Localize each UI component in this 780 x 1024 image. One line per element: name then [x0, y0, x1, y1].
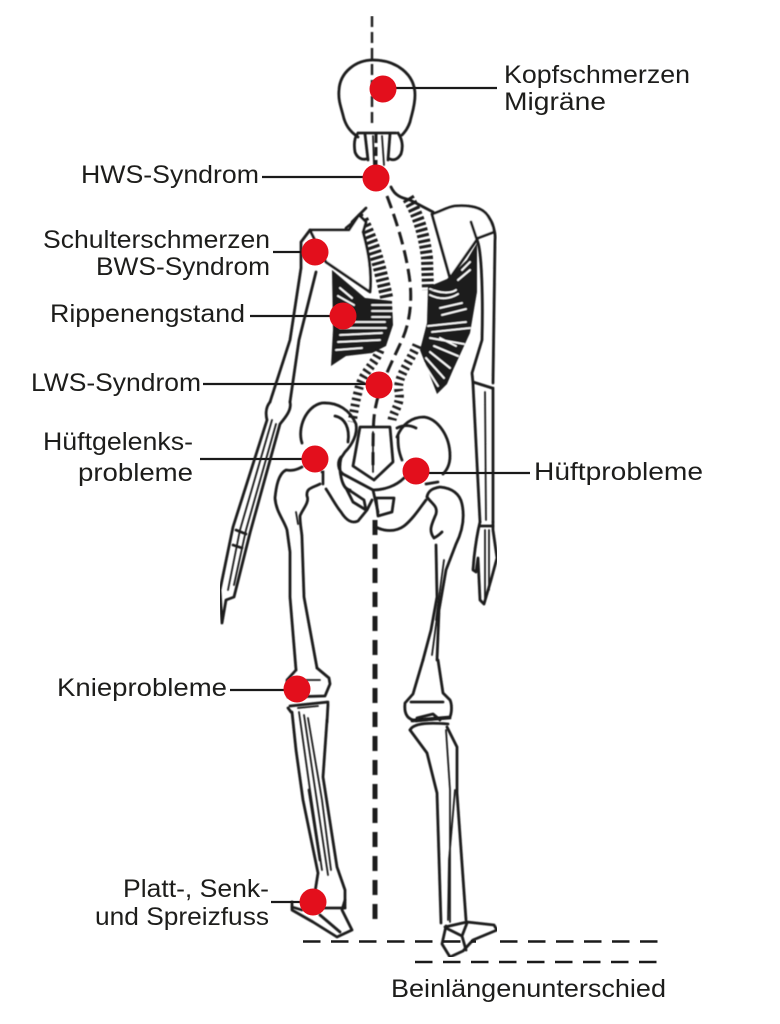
right foot [442, 922, 497, 957]
callout: LWS-Syndrom [31, 369, 392, 398]
callout: Schulterschmerzen BWS-Syndrom [43, 226, 328, 281]
callout: HWS-Syndrom: HWS-Syndrom [81, 161, 259, 189]
right femur [423, 482, 463, 660]
callout: Hüftgelenksprobleme [43, 428, 328, 487]
skeleton [220, 16, 497, 957]
callout: Knieprobleme: Knieprobleme [57, 674, 227, 702]
callout: Hüftprobleme [402, 458, 703, 486]
spine centre dashed line [372, 16, 411, 920]
left femur [275, 467, 323, 670]
callout: Knieprobleme [57, 674, 310, 702]
callout: Platt-, Senk- und Spreizfuss: und Spreizfuss [95, 903, 269, 931]
left scapula [310, 215, 371, 292]
left lower leg [292, 712, 345, 908]
callout: Schulterschmerzen BWS-Syndrom: Schulterschmerzen [43, 226, 270, 254]
label: Beinlängenunterschied: Beinlängenunterschied [391, 975, 666, 1003]
callout: Hüftgelenksprobleme: Hüftgelenks- [43, 428, 193, 456]
right knee [405, 660, 452, 721]
callout: Hüftprobleme: Hüftprobleme [534, 458, 703, 486]
callout: HWS-Syndrom [81, 161, 390, 192]
callout: Platt-, Senk- und Spreizfuss: Platt-, Senk- [123, 875, 269, 903]
callout: Platt-, Senk- und Spreizfuss [95, 875, 326, 931]
right lower leg [410, 723, 466, 923]
left arm [220, 230, 316, 623]
callout: LWS-Syndrom: LWS-Syndrom [31, 369, 201, 397]
callout: Kopfschmerzen Migräne: Migräne [504, 88, 606, 116]
callout: Rippenengstand: Rippenengstand [50, 300, 245, 328]
spine and ribs: right side [391, 187, 477, 420]
spine and ribs: left side [331, 208, 393, 422]
callout: Kopfschmerzen Migräne: Kopfschmerzen [504, 61, 690, 89]
right arm [471, 216, 497, 604]
callout: Kopfschmerzen Migräne [370, 61, 690, 116]
right scapula [432, 206, 494, 278]
callout: Schulterschmerzen BWS-Syndrom: BWS-Syndrom [96, 253, 270, 281]
pelvis [301, 403, 450, 530]
skull [339, 60, 415, 165]
left foot [292, 900, 352, 937]
left knee [287, 668, 330, 722]
callout: Rippenengstand [50, 300, 356, 330]
baseline dashed lines [303, 942, 658, 962]
callout: Hüftgelenksprobleme: probleme [78, 459, 193, 487]
